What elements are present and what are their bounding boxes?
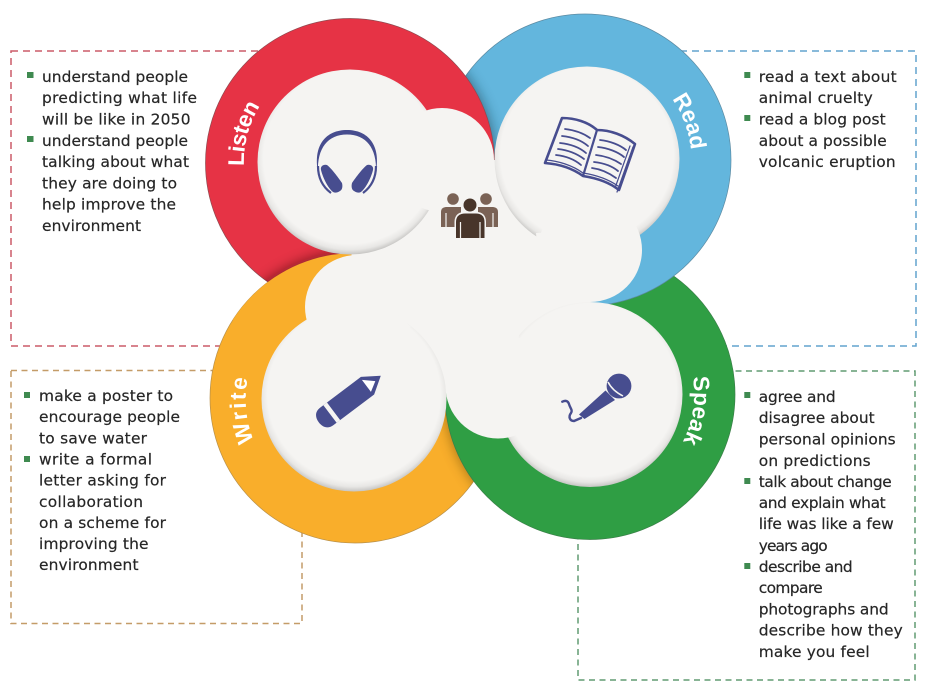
panel: listen outcomes: understand people bbox=[42, 132, 188, 150]
panel: write outcomes: on a scheme for bbox=[39, 514, 167, 532]
panel: read outcomes bbox=[620, 51, 916, 346]
ring: write base bbox=[210, 253, 500, 543]
panel: write outcomes: improving the bbox=[39, 535, 148, 553]
panel: read outcomes: read a text about bbox=[759, 68, 897, 86]
panel: speak outcomes: personal opinions bbox=[759, 430, 896, 448]
label: Listen: Listen bbox=[228, 102, 260, 164]
panel: write outcomes: make a poster to bbox=[39, 387, 173, 405]
panel: read outcomes: volcanic eruption bbox=[759, 153, 896, 171]
panel: listen outcomes: understand people bbox=[42, 68, 188, 86]
panel: read outcomes: about a possible bbox=[759, 132, 887, 150]
centre blob bbox=[258, 66, 682, 492]
panel: listen outcomes: they are doing to bbox=[42, 174, 177, 192]
panel: listen outcomes: talking about what bbox=[42, 153, 189, 171]
icon: headphones bbox=[317, 130, 377, 193]
panel: speak outcomes: agree and bbox=[759, 388, 836, 406]
panel: write outcomes: write a formal bbox=[39, 450, 152, 468]
panel: write outcomes: collaboration bbox=[39, 493, 143, 511]
icon: open book bbox=[545, 118, 635, 192]
panel: speak outcomes: describe and bbox=[759, 558, 853, 576]
panel: write outcomes: encourage people bbox=[39, 408, 180, 426]
panel: speak outcomes: years ago bbox=[759, 537, 828, 555]
panel: read outcomes: read a blog post bbox=[759, 110, 886, 128]
label: Speak: Speak bbox=[683, 377, 710, 446]
panel: speak outcomes: talk about change bbox=[759, 473, 892, 491]
panel: write outcomes: letter asking for bbox=[39, 472, 167, 490]
panel: listen outcomes: help improve the bbox=[42, 196, 176, 214]
label: Write: Write bbox=[230, 378, 252, 446]
icon: pencil bbox=[312, 367, 387, 431]
panel: speak outcomes: life was like a few bbox=[759, 515, 894, 533]
panel: write outcomes bbox=[11, 370, 302, 624]
ring: read bbox=[466, 14, 732, 304]
ring: write overlap on listen bbox=[232, 254, 352, 320]
panel: speak outcomes: on predictions bbox=[759, 452, 871, 470]
icon: microphone bbox=[562, 374, 631, 421]
panel: read outcomes: animal cruelty bbox=[759, 89, 873, 107]
icon: people bbox=[441, 193, 498, 239]
panel: speak outcomes: compare bbox=[759, 579, 823, 597]
panel: write outcomes: environment bbox=[39, 556, 138, 574]
panel: listen outcomes: predicting what life bbox=[42, 89, 197, 107]
panel: speak outcomes: disagree about bbox=[759, 409, 875, 427]
panel: speak outcomes: make you feel bbox=[759, 643, 870, 661]
panel: write outcomes: to save water bbox=[39, 430, 148, 448]
panel: listen outcomes: will be like in 2050 bbox=[42, 110, 190, 128]
panel: listen outcomes: environment bbox=[42, 217, 141, 235]
panel: speak outcomes: photographs and bbox=[759, 600, 889, 618]
panel: speak outcomes bbox=[578, 371, 915, 680]
label: Read: Read bbox=[673, 92, 707, 148]
panel: speak outcomes: describe how they bbox=[759, 622, 903, 640]
ring: listen bbox=[205, 18, 495, 282]
panel: speak outcomes: and explain what bbox=[759, 494, 886, 512]
ring: speak bbox=[444, 248, 736, 540]
panel: listen outcomes bbox=[11, 51, 311, 346]
